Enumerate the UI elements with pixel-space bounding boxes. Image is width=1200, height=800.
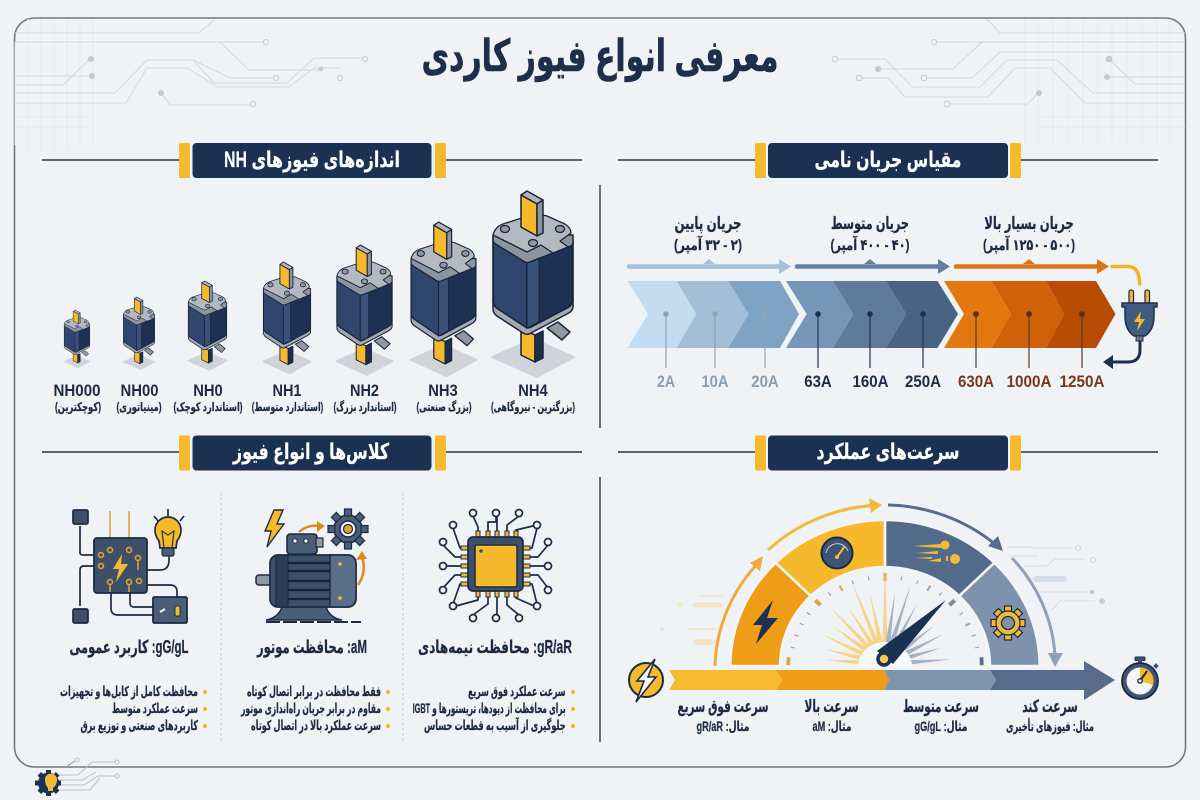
fuse NH2: (استاندارد بزرگ) (334, 399, 396, 414)
icon: gear (991, 606, 1025, 640)
fuse NH2: NH2 (350, 381, 379, 400)
arrow: high current range (956, 259, 1109, 274)
current values: 630A (958, 372, 994, 391)
arrow: low current range (629, 259, 791, 274)
current values: 2A (657, 372, 675, 391)
fuse NH4 (491, 191, 575, 415)
label: medium current: (۴۰ - ۴۰۰ آمپر) (830, 236, 910, 255)
fuse NH3 (410, 222, 477, 414)
speed arrow bar (669, 661, 1115, 700)
icon: start bolt (629, 659, 663, 702)
bullets: gR/aR: جلوگیری از آسیب به قطعات حساس (424, 717, 566, 733)
fuse NH1 (252, 262, 323, 415)
column title: aM: aM: محافظت موتور (256, 637, 367, 658)
bullets: aM (240, 684, 390, 733)
bullets: gG/gL: محافظت کامل از کابل‌ها و تجهیزات (60, 684, 198, 699)
icon: gauge dial (822, 538, 852, 568)
heading: classes and types: کلاس‌ها و انواع فیوز (232, 439, 389, 465)
label: high speed: سرعت بالا (804, 697, 858, 717)
current values (657, 372, 1104, 391)
bullets: gR/aR: برای محافظت از دیودها، تریستورها و IGBT (413, 701, 566, 716)
column title: gG/gL: gG/gL: کاربرد عمومی (69, 637, 188, 658)
current values: 250A (905, 372, 941, 391)
arc arrow: rising yellow (768, 498, 882, 550)
icon: motor with gear (256, 509, 368, 622)
circuit decoration: top left (15, 19, 368, 150)
fuse NH4: NH4 (518, 381, 548, 400)
column title: gR/aR: gR/aR: محافظت نیمه‌هادی (418, 637, 572, 657)
fuse NH1: NH1 (272, 381, 302, 400)
gauge segments (730, 520, 1040, 666)
current values: 20A (751, 372, 779, 391)
heading: rated current scale: مقیاس جریان نامی (814, 147, 962, 173)
fuse NH2 (334, 245, 396, 414)
fuse NH0: (استاندارد کوچک) (174, 400, 242, 415)
bullets: gG/gL: سرعت عملکرد متوسط (112, 701, 198, 716)
gauge ticks (786, 573, 984, 665)
label: slow speed: سرعت کند (1022, 697, 1078, 717)
circuit decoration: top right (832, 19, 1185, 143)
chevron scale bands (628, 281, 1116, 348)
bullets: aM: سرعت عملکرد بالا در اتصال کوتاه (251, 718, 381, 733)
icon: speed lines (913, 540, 960, 564)
gauge hub (858, 642, 912, 667)
bullets: gG/gL (60, 684, 207, 733)
faded speed lines (660, 546, 1105, 642)
label: ultra fast (678, 697, 768, 734)
gauge sunburst (819, 566, 951, 665)
gauge needle (877, 600, 946, 665)
label: medium speed: مثال: gG/gL (914, 719, 968, 734)
current values: 1000A (1006, 372, 1052, 391)
heading: rated current scale (618, 143, 1158, 178)
label: high speed (804, 697, 858, 734)
panel: operating speeds (629, 498, 1159, 734)
panel: NH fuse sizes (54, 191, 575, 415)
panel: fuse classes (60, 493, 575, 743)
bullets: aM: مقاوم در برابر جریان راه‌اندازی موتور (240, 701, 381, 717)
icon: lightning bolt (753, 600, 778, 644)
fuse NH3: (بزرگ صنعتی) (416, 399, 472, 414)
label: ultra fast: مثال: gR/aR (696, 719, 750, 734)
fuse NH000: NH000 (54, 381, 100, 400)
label: very high current: (۵۰۰ - ۱۲۵۰ آمپر) (983, 236, 1075, 255)
current values: 10A (702, 372, 728, 391)
bullets: gR/aR: سرعت عملکرد فوق سریع (468, 684, 566, 699)
current values: 160A (852, 372, 888, 391)
current values: 1250A (1060, 372, 1104, 391)
label: low current: (۲ - ۳۲ آمپر) (674, 236, 742, 255)
label: slow speed (1006, 697, 1094, 734)
icon: circuit panel and bulb (73, 509, 187, 623)
fuse NH4: (بزرگترین - نیروگاهی) (491, 400, 575, 415)
label: medium speed: سرعت متوسط (903, 697, 979, 717)
fuse NH00: (مینیاتوری) (116, 400, 162, 415)
panel: current scale (628, 214, 1157, 391)
heading: NH sizes: اندازه‌های فیوزهای NH (224, 147, 400, 173)
label: very high current (983, 214, 1075, 255)
label: low current: جریان پایین (674, 214, 742, 234)
label: medium current: جریان متوسط (831, 214, 909, 234)
bullets: gR/aR (413, 684, 575, 733)
fuse NH00 (116, 297, 162, 415)
heading: operating speeds (618, 436, 1158, 470)
label: slow speed: مثال: فیوزهای تأخیری (1006, 718, 1094, 734)
label: medium current (830, 214, 910, 255)
title: معرفی انواع فیوز کاردی (422, 32, 778, 82)
label: low current (674, 214, 742, 255)
arc arrow: falling slate (888, 505, 1003, 551)
fuse NH000: (کوچکترین) (55, 400, 101, 415)
heading: NH sizes (42, 143, 582, 178)
column dividers (221, 493, 403, 743)
label: very high current: جریان بسیار بالا (984, 214, 1074, 234)
fuse NH1: (استاندارد متوسط) (252, 400, 323, 415)
fuse NH0 (174, 281, 242, 415)
label: high speed: مثال: aM (812, 719, 852, 734)
fuse NH000 (54, 310, 101, 415)
current values: 63A (804, 372, 832, 391)
logo: gear with circuit (35, 758, 119, 796)
arc arrow: falling light (1012, 558, 1063, 667)
fuse NH00: NH00 (120, 381, 158, 400)
icon: semiconductor chip (440, 510, 552, 622)
heading: classes and types (42, 436, 582, 470)
arrow: medium current range (797, 259, 950, 274)
bullets: aM: فقط محافظت در برابر اتصال کوتاه (247, 684, 381, 699)
fuse NH0: NH0 (193, 381, 223, 400)
label: medium speed (903, 697, 979, 734)
panel dividers (599, 185, 601, 742)
icon: plug with connector (1103, 266, 1157, 369)
label: ultra fast: سرعت فوق سریع (678, 697, 768, 717)
arc arrow: rising orange (715, 556, 763, 666)
scale markers (663, 311, 1085, 368)
icon: stopwatch (1122, 657, 1159, 699)
bullets: gG/gL: کاربردهای صنعتی و توزیع برق (80, 718, 198, 733)
fuse NH3: NH3 (428, 381, 458, 400)
heading: operating speeds: سرعت‌های عملکرد (816, 439, 960, 465)
